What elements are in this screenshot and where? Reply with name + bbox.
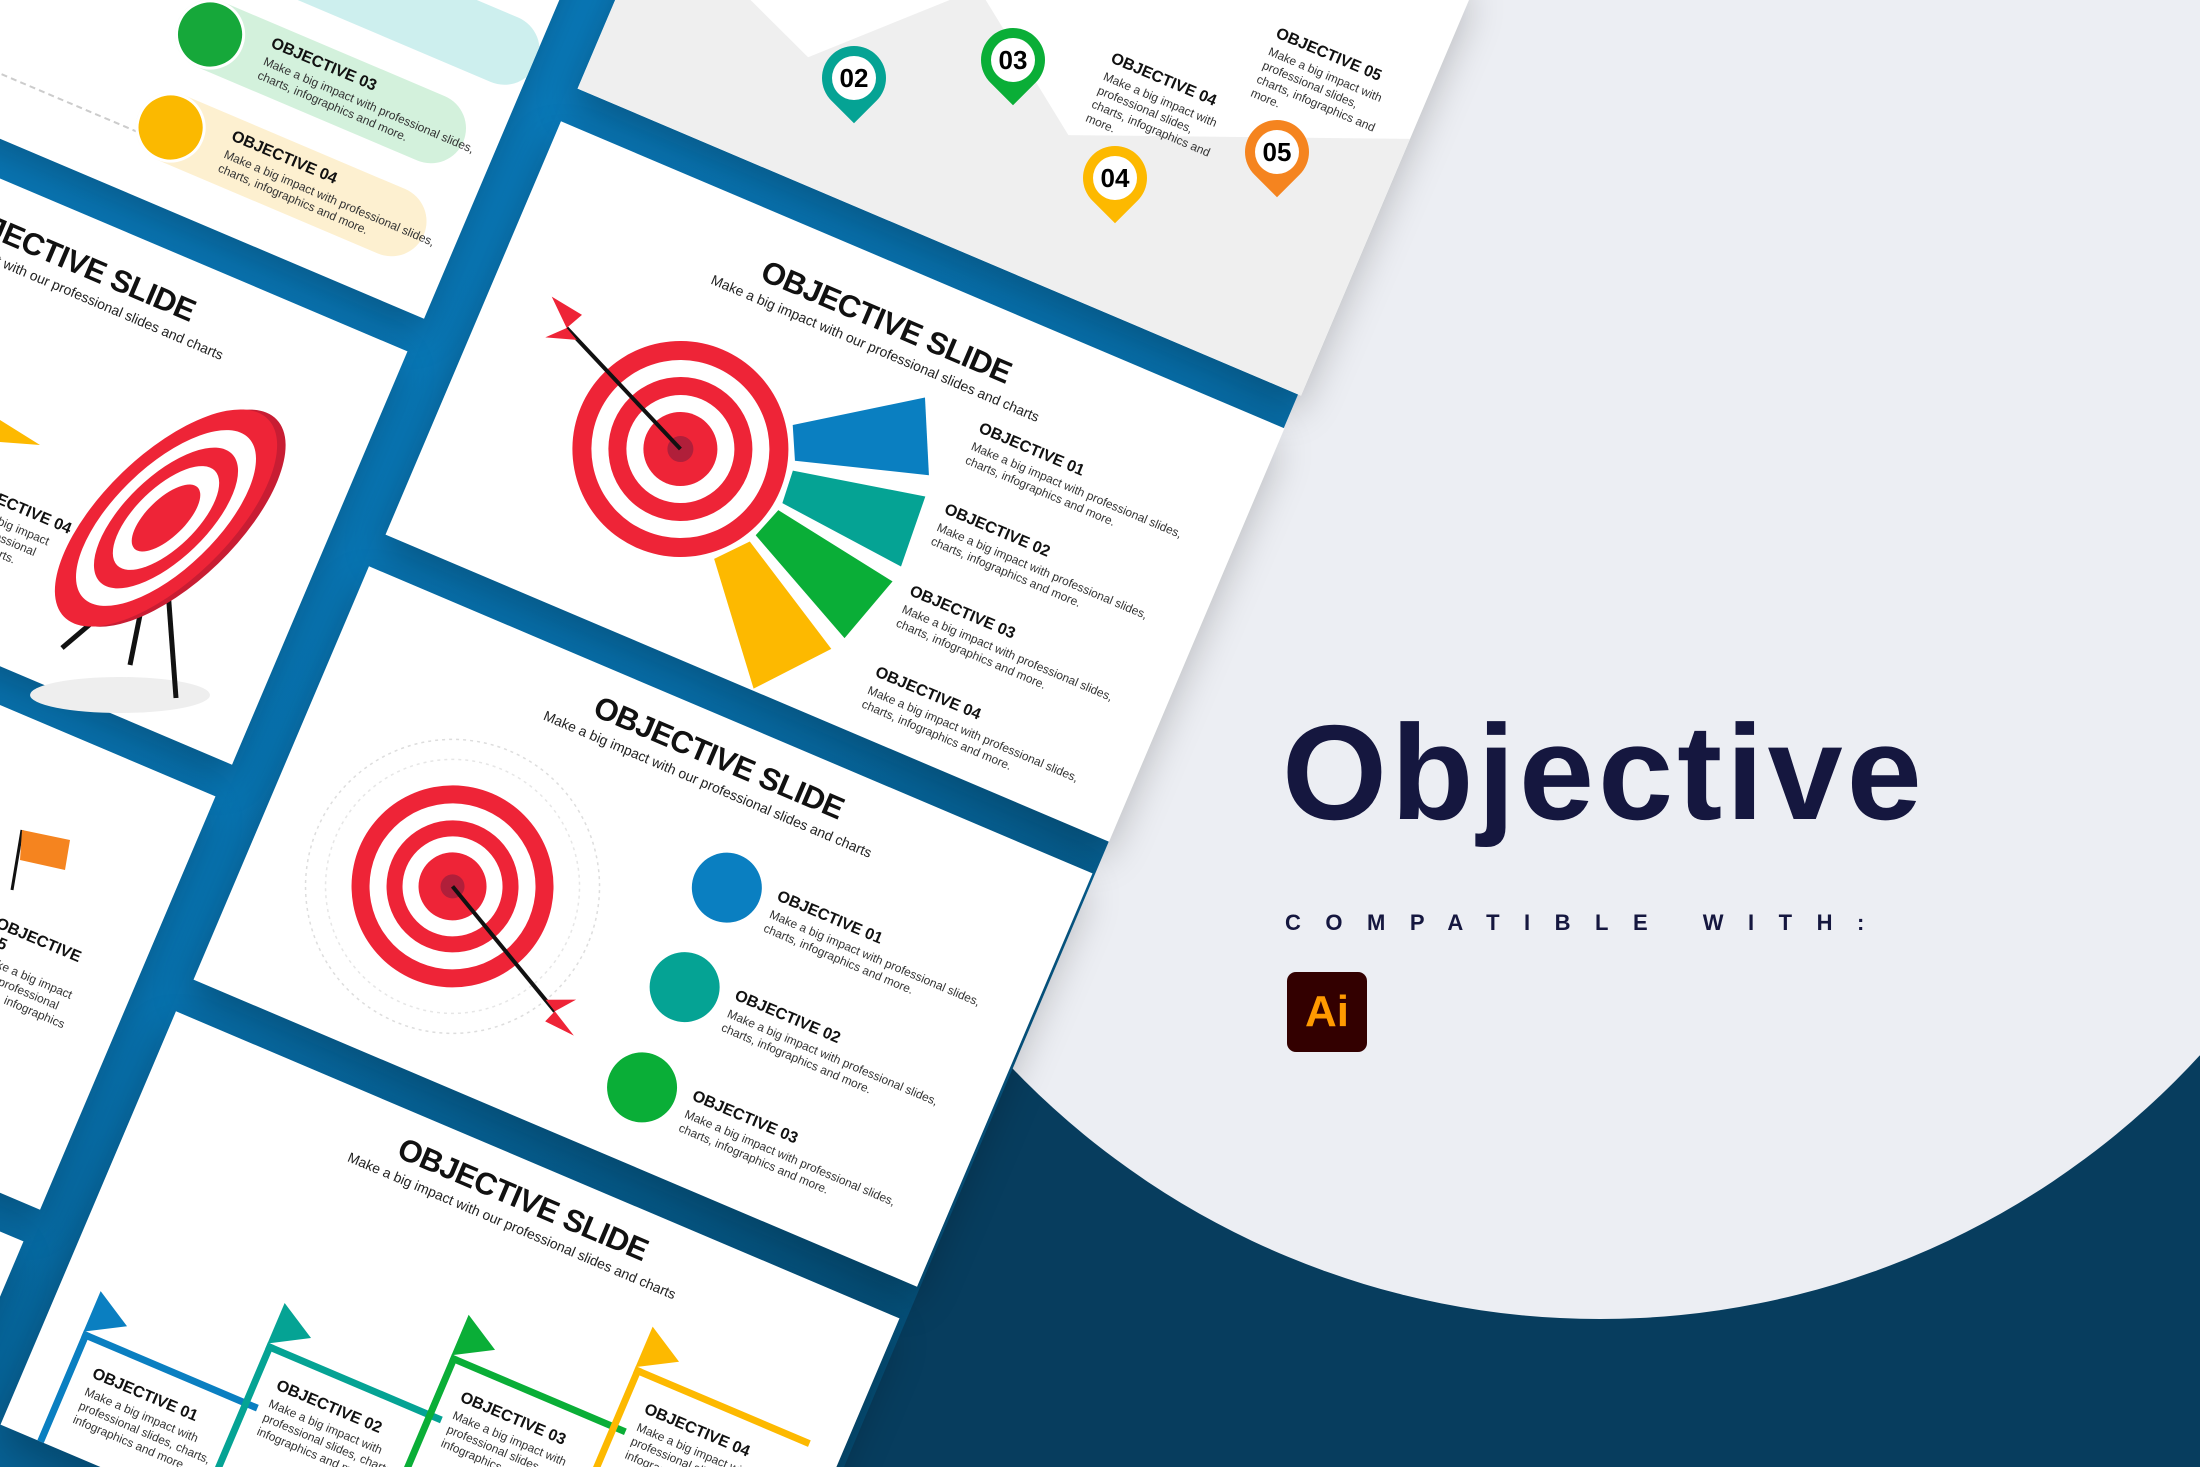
icon: paper plane	[0, 420, 40, 445]
slide A: target with bars: Make a big impact with professional slides, charts, infographics and more.	[860, 683, 1080, 785]
slide: pills (top-left)	[0, 0, 599, 319]
pins: 05	[1263, 137, 1291, 167]
flag 3	[393, 1354, 627, 1467]
pins: 04	[1101, 163, 1129, 193]
text: objective 04 (left slide)	[0, 478, 74, 566]
icon: Adobe Illustrator	[1287, 972, 1367, 1052]
pill: objective 04: Make a big impact with professional slides, charts, infographics and more.	[216, 147, 437, 249]
objectives list: Make a big impact with professional slides, charts, infographics and more.	[963, 439, 1184, 541]
slide: 3D target (left)	[0, 44, 407, 765]
pill: objective 03: OBJECTIVE 03	[268, 35, 379, 95]
slide D: pins (top)	[578, 0, 1476, 396]
slide C: flags: OBJECTIVE SLIDE	[393, 1131, 653, 1268]
text: objective 05 (pins slide): Make a big impact with professional slides, charts, infographics and more.	[1249, 44, 1384, 135]
slide B: target with circles: OBJECTIVE 01	[774, 888, 885, 948]
flag 3: OBJECTIVE 03	[458, 1389, 568, 1449]
icon: orange flag	[10, 830, 70, 890]
slide A: target with bars: OBJECTIVE 04	[873, 664, 983, 724]
pin 04	[1070, 133, 1160, 223]
slide: bottom-left	[0, 934, 23, 1467]
objectives list: OBJECTIVE 01	[976, 420, 1087, 480]
text: objective 05 (pins slide): OBJECTIVE 05	[1273, 25, 1384, 85]
text: compatible with: COMPATIBLE WITH:	[1285, 910, 1889, 935]
flag 1	[25, 1331, 259, 1467]
pin 05	[1232, 107, 1322, 197]
chart: target with colored bars	[545, 296, 929, 689]
slide A: target with bars: OBJECTIVE 03	[907, 583, 1018, 643]
slide B: target with circles: Make a big impact with professional slides, charts, infographics and more.	[762, 907, 982, 1009]
flag 2: OBJECTIVE 02	[274, 1377, 384, 1437]
pill: objective 03	[164, 0, 477, 174]
slide A: target with bars: OBJECTIVE 02	[942, 501, 1052, 561]
slide B: target with circles: Make a big impact with our professional slides and charts	[541, 707, 874, 861]
slide B: target with circles: Make a big impact with professional slides, charts, infographics and more.	[719, 1007, 940, 1108]
pill: objective 04: OBJECTIVE 04	[229, 128, 340, 188]
flag 2	[209, 1343, 443, 1467]
slide B: target with circles: OBJECTIVE 03	[690, 1088, 800, 1147]
slide A: target with bars: Make a big impact with professional slides, charts, infographics and more.	[894, 602, 1115, 704]
slide C: flags: Make a big impact with our professional slides and charts	[345, 1149, 678, 1302]
slide A: target with bars: Make a big impact with professional slides, charts, infographics and more.	[929, 520, 1150, 622]
pin 02	[809, 33, 899, 123]
icon: Adobe Illustrator: Ai	[1305, 987, 1349, 1036]
pill: objective 03: Make a big impact with professional slides, charts, infographics and more.	[256, 54, 476, 156]
pin 03	[968, 15, 1058, 105]
pins: 03	[999, 45, 1027, 75]
heading: Objective: Objective	[1282, 697, 1926, 848]
flag 4	[577, 1366, 811, 1467]
pill: objective 02	[219, 0, 550, 96]
text: objective 05 (left slide)	[0, 915, 83, 1031]
flag 1: OBJECTIVE 01	[90, 1365, 200, 1425]
slide C: flags	[1, 1011, 899, 1467]
text: objective 04 (pins slide): OBJECTIVE 04	[1108, 50, 1219, 110]
slide B: target with circles: OBJECTIVE SLIDE	[589, 689, 849, 826]
slide A: target with bars: Make a big impact with our professional slides and charts	[709, 271, 1042, 425]
slide: flag (left)	[0, 489, 215, 1210]
slide B: target with circles: Make a big impact with professional slides, charts, infographics and more.	[677, 1107, 897, 1209]
pins: 02	[840, 63, 868, 93]
pins	[822, 28, 1309, 224]
text: objective 04 (pins slide): Make a big impact with professional slides, charts, infographics and more.	[1084, 69, 1219, 160]
slide A: target with bars	[386, 121, 1284, 842]
icon: 3D target on stand	[30, 410, 286, 713]
slide B: target with circles: OBJECTIVE 02	[732, 987, 843, 1047]
flag 4: OBJECTIVE 04	[642, 1401, 752, 1461]
chart: target with arrow	[304, 738, 762, 1122]
title: OBJECTIVE SLIDE	[756, 253, 1017, 390]
pill: objective 04	[125, 82, 437, 267]
slide B: target with circles	[194, 566, 1092, 1287]
